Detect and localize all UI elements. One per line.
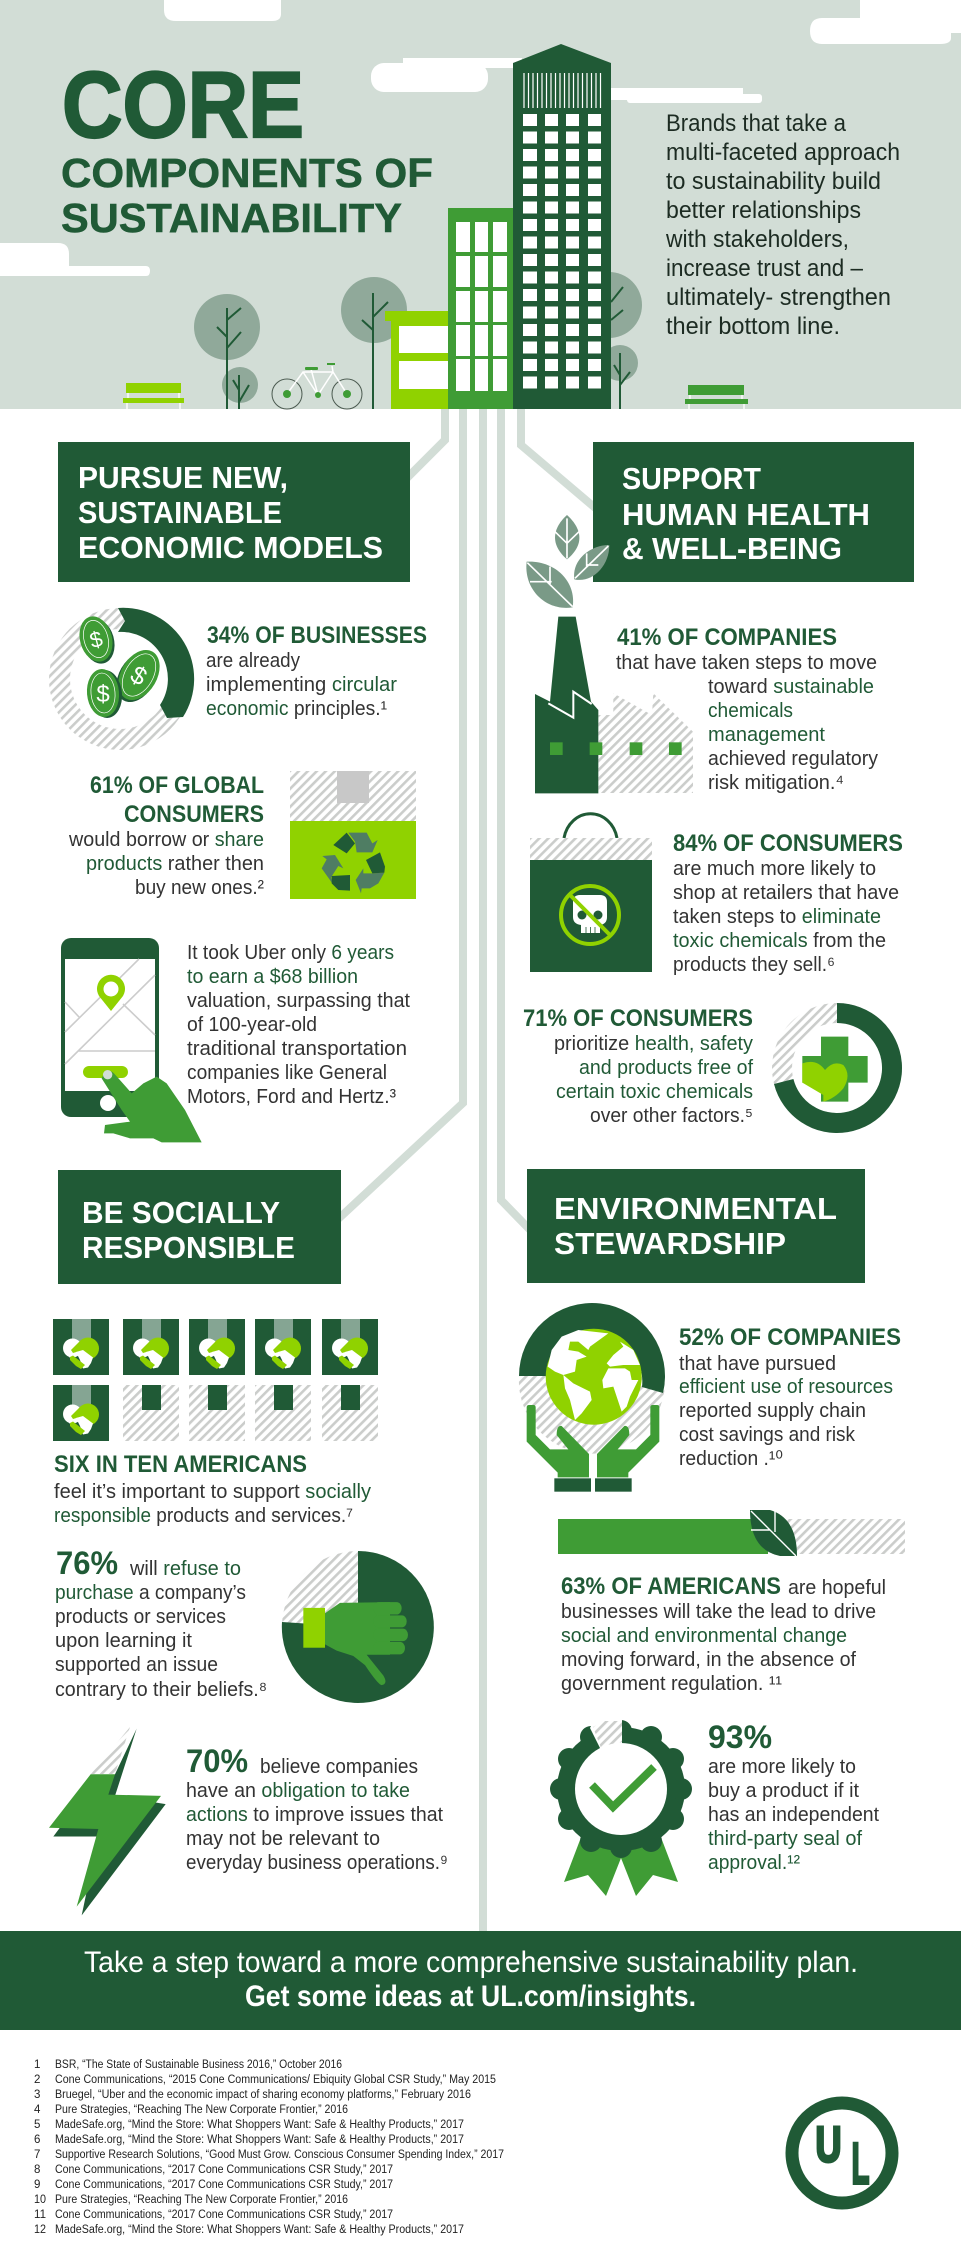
section heading: pursue new sustainable economic models: PURSUE NEW, <box>78 460 288 495</box>
text: uber valuation: traditional transportation <box>187 1038 407 1060</box>
panel: header city scene <box>0 0 961 409</box>
intro paragraph <box>665 110 900 340</box>
section heading: support human health <box>593 442 914 582</box>
text: 70% believe companies: 70% <box>186 1743 248 1779</box>
icon: coins donut 34%: $ <box>87 626 105 653</box>
references list: Pure Strategies, “Reaching The New Corporate Frontier,” 2016 <box>55 2104 348 2116</box>
connector lines <box>335 409 600 1931</box>
icon: factory <box>535 617 693 793</box>
references list: MadeSafe.org, “Mind the Store: What Shoppers Want: Safe & Healthy Products,” 2017 <box>55 2119 464 2131</box>
text: 70% believe companies: everyday business operations.⁹ <box>186 1852 448 1874</box>
text: 93% seal of approval: third-party seal of <box>708 1828 862 1850</box>
chart: 63% progress bar with leaf <box>558 1510 905 1556</box>
references list: 7 <box>34 2149 40 2161</box>
text: 71% of consumers <box>523 1005 753 1127</box>
text: 76% will refuse to purchase: supported an issue <box>55 1654 218 1676</box>
text: 52% of companies: that have pursued <box>679 1353 836 1375</box>
text: 61% of global consumers: products rather then <box>86 853 264 875</box>
text: 63% of americans: government regulation. ¹¹ <box>561 1673 782 1695</box>
title <box>61 52 433 241</box>
text: 61% of global consumers: would borrow or share <box>68 829 264 851</box>
references list: MadeSafe.org, “Mind the Store: What Shoppers Want: Safe & Healthy Products,” 2017 <box>55 2224 464 2236</box>
references list: Pure Strategies, “Reaching The New Corporate Frontier,” 2016 <box>55 2194 348 2206</box>
text: 93% seal of approval: are more likely to <box>708 1756 856 1778</box>
text: uber valuation: of 100-year-old <box>187 1014 317 1036</box>
bench left <box>123 383 184 409</box>
text: 61% of global consumers: buy new ones.² <box>135 877 264 899</box>
text: 63% of americans: moving forward, in the absence of <box>561 1649 856 1671</box>
text: 63% of americans: are hopeful <box>788 1577 886 1599</box>
icon: phone with map <box>61 938 202 1142</box>
text: 52% of companies <box>679 1324 901 1470</box>
text: 41% of companies: achieved regulatory <box>708 748 878 770</box>
text: 63% of americans: social and environmental change <box>561 1625 847 1647</box>
references list: Cone Communications, “2017 Cone Communications CSR Study,” 2017 <box>55 2209 393 2221</box>
text: 63% of americans <box>561 1573 886 1695</box>
bench right <box>685 385 748 409</box>
text: 70% believe companies: have an obligation to take <box>186 1780 410 1802</box>
icon: thumbs down pie <box>282 1551 434 1703</box>
section heading: support human health: SUPPORT <box>622 461 761 496</box>
references list: Cone Communications, “2017 Cone Communications CSR Study,” 2017 <box>55 2164 393 2176</box>
text: 76% will refuse to purchase: purchase a company’s <box>55 1582 246 1604</box>
text: 52% of companies: reported supply chain <box>679 1400 866 1422</box>
text: 93% seal of approval: buy a product if it <box>708 1780 859 1802</box>
text: 71% of consumers: over other factors.⁵ <box>590 1105 753 1127</box>
intro paragraph: Brands that take a <box>666 110 847 137</box>
icon: coins donut 34%: $ <box>125 660 152 692</box>
text: 76% will refuse to purchase: products or services <box>55 1606 226 1628</box>
text: 84% of consumers: are much more likely to <box>673 858 876 880</box>
section heading: pursue new sustainable economic models <box>58 442 410 582</box>
text: 41% of companies: chemicals <box>708 700 793 722</box>
UL logo <box>792 2103 892 2203</box>
icon: coins donut 34%: $ <box>96 681 110 708</box>
references list: 2 <box>34 2074 40 2086</box>
section heading: be socially responsible: RESPONSIBLE <box>82 1230 295 1265</box>
icon: globe in hands <box>519 1303 665 1492</box>
text: 41% of companies: that have taken steps to move <box>616 652 877 674</box>
text: uber valuation <box>187 942 410 1108</box>
text: 84% of consumers: taken steps to eliminate <box>673 906 881 928</box>
references list: 5 <box>34 2119 40 2131</box>
intro paragraph: multi-faceted approach <box>666 139 900 166</box>
UL logo: U <box>816 2116 842 2172</box>
title: COMPONENTS OF <box>61 150 433 196</box>
text: 41% of companies: management <box>708 724 825 746</box>
references list: 1 <box>34 2059 40 2071</box>
call to action banner: Get some ideas at UL.com/insights. <box>245 1980 696 2013</box>
text: 76% will refuse to purchase: upon learning it <box>55 1630 192 1652</box>
icon: six in ten pictogram <box>53 1319 378 1441</box>
text: 52% of companies: reduction .¹⁰ <box>679 1448 783 1470</box>
intro paragraph: ultimately- strengthen <box>666 284 891 311</box>
text: 61% of global consumers <box>68 772 264 899</box>
call to action banner <box>0 1931 961 2030</box>
text: 71% of consumers: and products free of <box>579 1057 753 1079</box>
icon: shopping bag no toxins <box>530 814 652 972</box>
icon: recycling box <box>290 771 416 899</box>
references list: MadeSafe.org, “Mind the Store: What Shoppers Want: Safe & Healthy Products,” 2017 <box>55 2134 464 2146</box>
references list: Cone Communications, “2017 Cone Communications CSR Study,” 2017 <box>55 2179 393 2191</box>
text: 70% believe companies <box>186 1743 448 1874</box>
section heading: be socially responsible <box>58 1170 341 1284</box>
intro paragraph: better relationships <box>666 197 861 224</box>
references list: 10 <box>34 2194 46 2206</box>
text: 84% of consumers: toxic chemicals from the <box>673 930 886 952</box>
text: 84% of consumers <box>673 830 903 976</box>
text: six in ten americans: SIX IN TEN AMERICANS <box>54 1451 307 1478</box>
text: 84% of consumers: products they sell.⁶ <box>673 954 835 976</box>
text: 52% of companies: 52% OF COMPANIES <box>679 1324 901 1351</box>
section heading: environmental stewardship: STEWARDSHIP <box>554 1226 786 1261</box>
text: 70% believe companies: actions to improve issues that <box>186 1804 443 1826</box>
section heading: support human health: HUMAN HEALTH <box>622 497 870 532</box>
text: six in ten americans: responsible products and services.⁷ <box>54 1505 353 1527</box>
text: 41% of companies <box>616 624 878 794</box>
icon: bicycle <box>272 363 362 409</box>
intro paragraph: their bottom line. <box>666 313 840 340</box>
text: 34% of businesses: 34% OF BUSINESSES <box>207 622 427 649</box>
intro paragraph: to sustainability build <box>666 168 881 195</box>
text: 63% of americans: businesses will take the lead to drive <box>561 1601 876 1623</box>
references list <box>34 2059 504 2236</box>
text: 71% of consumers: certain toxic chemicals <box>556 1081 753 1103</box>
text: 52% of companies: efficient use of resources <box>679 1376 893 1398</box>
references list: Cone Communications, “2015 Cone Communications/ Ebiquity Global CSR Study,” May 2015 <box>55 2074 496 2086</box>
section heading: environmental stewardship: ENVIRONMENTAL <box>554 1191 837 1226</box>
section heading: pursue new sustainable economic models: SUSTAINABLE <box>78 495 282 530</box>
text: six in ten americans: feel it’s important to support socially <box>54 1481 371 1503</box>
intro paragraph: increase trust and – <box>666 255 864 282</box>
call to action banner: Take a step toward a more comprehensive sustainability plan. <box>84 1946 858 1979</box>
text: 93% seal of approval: has an independent <box>708 1804 879 1826</box>
references list: 11 <box>34 2209 46 2221</box>
intro paragraph: with stakeholders, <box>665 226 849 253</box>
references list: 9 <box>34 2179 40 2191</box>
text: uber valuation: It took Uber only 6 years <box>187 942 394 964</box>
text: 76% will refuse to purchase <box>55 1545 267 1701</box>
text: 93% seal of approval <box>708 1719 879 1874</box>
section heading: support human health: & WELL-BEING <box>622 531 842 566</box>
icon: seal of approval <box>550 1712 692 1896</box>
text: 84% of consumers: 84% OF CONSUMERS <box>673 830 903 857</box>
icon: health donut <box>772 1003 902 1133</box>
text: six in ten americans <box>54 1451 371 1527</box>
text: 71% of consumers: 71% OF CONSUMERS <box>523 1005 753 1032</box>
building: mid green <box>448 208 513 409</box>
references list: 4 <box>34 2104 41 2116</box>
text: 41% of companies: risk mitigation.⁴ <box>708 772 844 794</box>
section heading: environmental stewardship <box>527 1169 865 1283</box>
text: uber valuation: companies like General <box>187 1062 387 1084</box>
text: 34% of businesses: are already <box>206 650 300 672</box>
title: CORE <box>62 52 304 157</box>
text: 71% of consumers: prioritize health, safety <box>554 1033 753 1055</box>
references list: 3 <box>34 2089 40 2101</box>
title: SUSTAINABILITY <box>61 195 402 241</box>
icon: leaves <box>526 515 609 608</box>
text: 41% of companies: 41% OF COMPANIES <box>617 624 837 651</box>
text: uber valuation: Motors, Ford and Hertz.³ <box>187 1086 396 1108</box>
section heading: be socially responsible: BE SOCIALLY <box>82 1195 280 1230</box>
building: tall tower <box>513 44 611 409</box>
UL logo: L <box>852 2132 870 2196</box>
text: 93% seal of approval: 93% <box>708 1719 772 1755</box>
text: 76% will refuse to purchase: contrary to their beliefs.⁸ <box>55 1679 267 1701</box>
references list: 8 <box>34 2164 40 2176</box>
references list: 6 <box>34 2134 40 2146</box>
text: uber valuation: to earn a $68 billion <box>187 966 358 988</box>
text: 76% will refuse to purchase: 76% <box>56 1545 118 1581</box>
trees <box>194 272 642 409</box>
text: 93% seal of approval: approval.¹² <box>708 1852 800 1874</box>
text: uber valuation: valuation, surpassing that <box>187 990 410 1012</box>
clouds <box>0 0 961 276</box>
text: 52% of companies: cost savings and risk <box>679 1424 856 1446</box>
text: 70% believe companies: believe companies <box>260 1756 418 1778</box>
text: 76% will refuse to purchase: will refuse to <box>129 1558 241 1580</box>
references list: 12 <box>34 2224 46 2236</box>
icon: coins donut 34% <box>49 608 194 750</box>
text: 41% of companies: toward sustainable <box>708 676 874 698</box>
text: 34% of businesses <box>206 622 427 720</box>
text: 63% of americans: 63% OF AMERICANS <box>561 1573 781 1600</box>
section heading: pursue new sustainable economic models: ECONOMIC MODELS <box>78 530 383 565</box>
text: 84% of consumers: shop at retailers that have <box>673 882 899 904</box>
building: low lime <box>385 311 448 409</box>
text: 70% believe companies: may not be relevant to <box>186 1828 380 1850</box>
text: 61% of global consumers: CONSUMERS <box>124 801 264 828</box>
text: 34% of businesses: implementing circular <box>206 674 397 696</box>
text: 61% of global consumers: 61% OF GLOBAL <box>90 772 264 799</box>
references list: Bruegel, “Uber and the economic impact of sharing economy platforms,” February 2016 <box>55 2089 471 2101</box>
references list: BSR, “The State of Sustainable Business 2016,” October 2016 <box>55 2059 342 2071</box>
references list: Supportive Research Solutions, “Good Must Grow. Conscious Consumer Spending Index,” 2017 <box>55 2149 504 2161</box>
text: 34% of businesses: economic principles.¹ <box>206 698 387 720</box>
icon: lightning bolt <box>49 1727 166 1915</box>
